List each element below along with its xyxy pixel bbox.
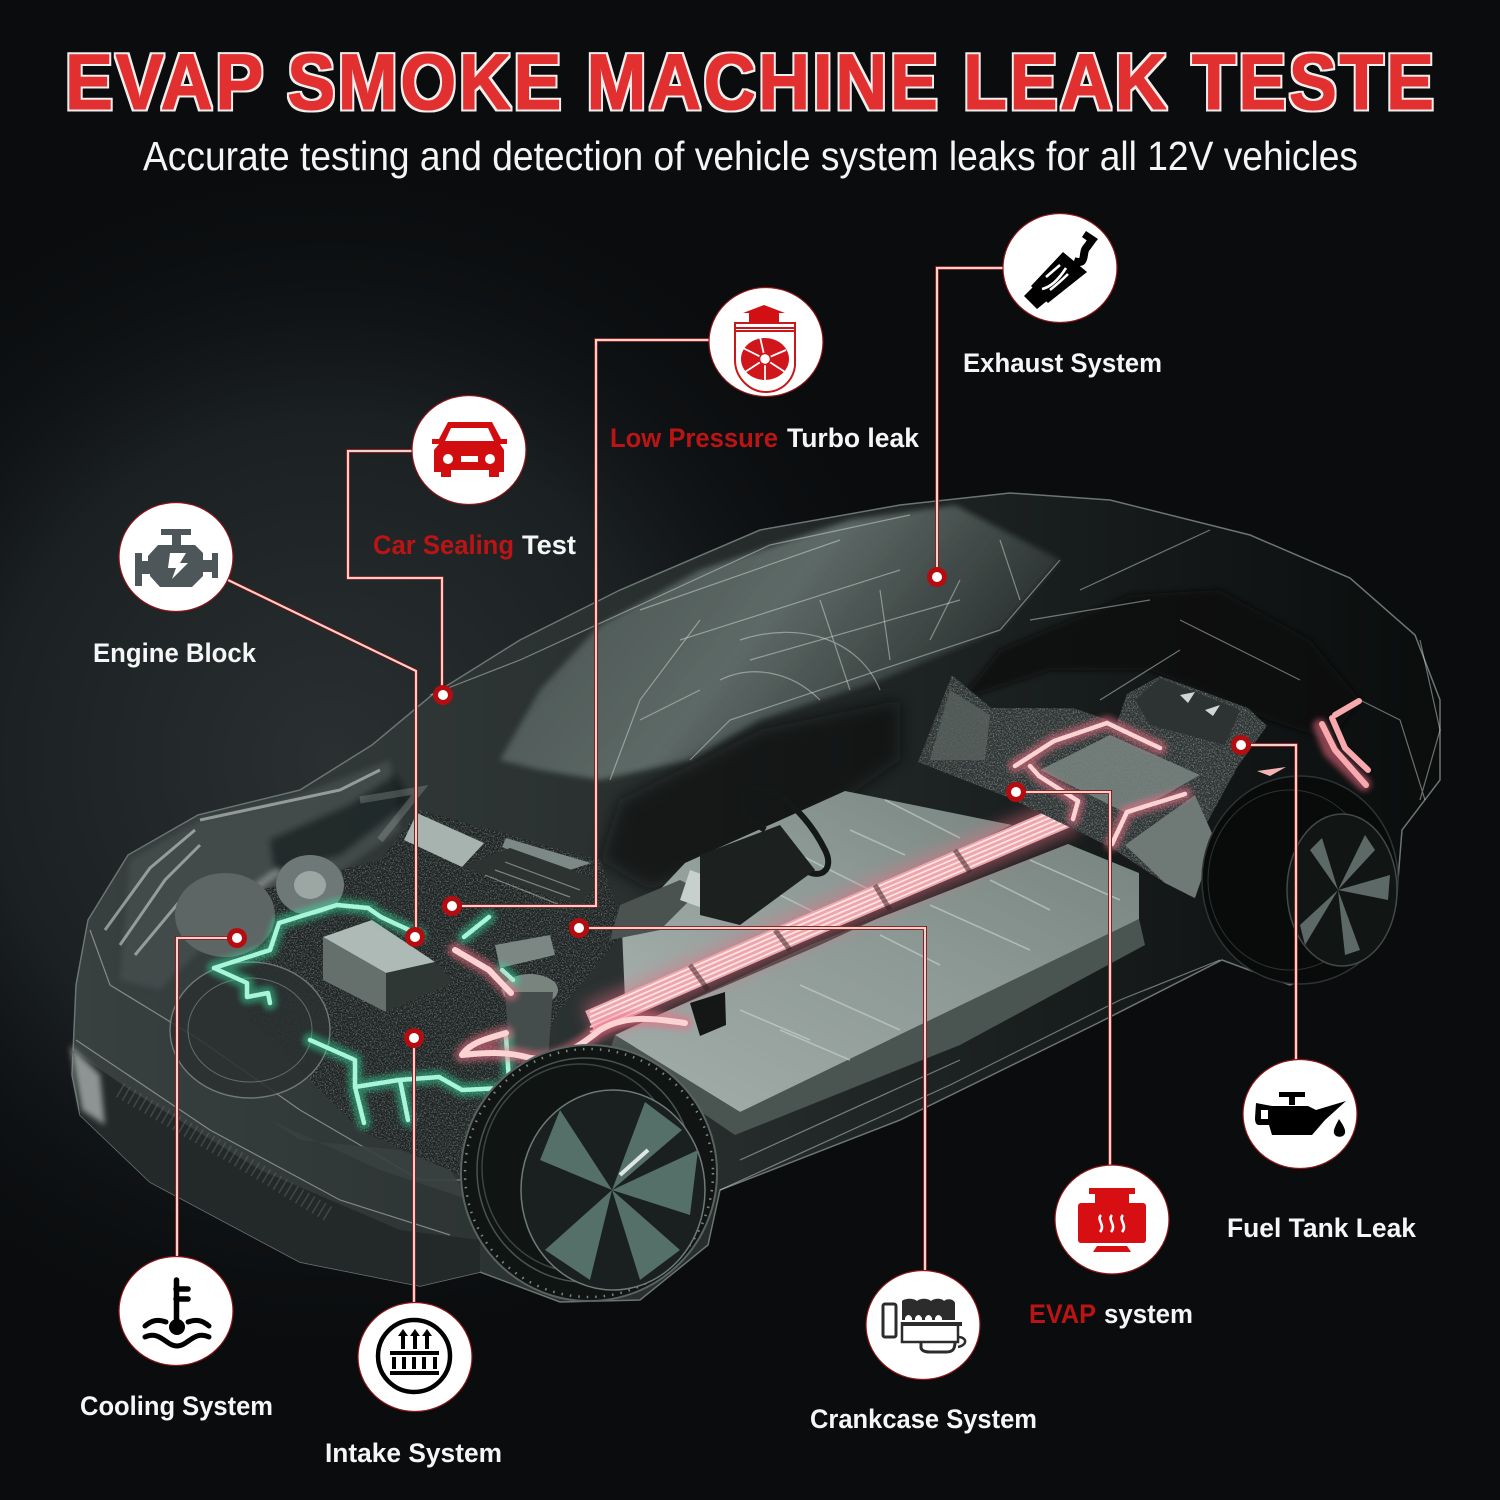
icon: turbo (709, 288, 823, 396)
engine pulley (276, 855, 344, 915)
label: low pressure turbo leak (610, 423, 920, 453)
label: engine block: Engine Block (93, 638, 257, 668)
label: car sealing test: Car Sealing (373, 530, 514, 560)
icon: crankcase (866, 1270, 980, 1380)
front engine bay (170, 800, 718, 1200)
label: EVAP system: EVAP (1029, 1299, 1096, 1329)
label: car sealing test: Test (522, 530, 576, 560)
transparent car illustration (70, 493, 1440, 1302)
pink front hoses (455, 950, 685, 1059)
rear wheel (1202, 776, 1398, 984)
icon: EVAP system (1055, 1165, 1169, 1274)
front lower bumper (72, 1050, 480, 1286)
strut tower (502, 974, 558, 1006)
label: EVAP system (1029, 1299, 1193, 1329)
label: intake system: Intake System (325, 1438, 502, 1468)
icon: intake system (358, 1302, 472, 1412)
title: EVAP SMOKE MACHINE LEAK TESTE (65, 38, 1434, 126)
side windows and rear cabin (960, 590, 1360, 740)
green glowing coolant lines (214, 905, 513, 1123)
windshield and roof glass (500, 505, 1060, 780)
icon: engine block (119, 502, 233, 612)
callout leader lines (177, 268, 1296, 1303)
label: exhaust system: Exhaust System (963, 348, 1162, 378)
battery pack upper half (622, 791, 1012, 1000)
label: crankcase system: Crankcase System (810, 1404, 1037, 1434)
headlight and body contour lines (90, 515, 1440, 1190)
label: cooling system: Cooling System (80, 1391, 273, 1421)
steering wheel and seat (700, 788, 828, 925)
label: low pressure turbo leak: Turbo leak (787, 423, 920, 453)
upper control box (404, 813, 484, 867)
battery seams (740, 800, 1120, 1060)
glowing pink centre tunnel (590, 802, 1075, 1032)
rear pink hoses (1015, 701, 1368, 844)
label: low pressure turbo leak: Low Pressure (610, 423, 778, 453)
subtitle: Accurate testing and detection of vehicle system leaks for all 12V vehicles (143, 133, 1358, 179)
front battery module (323, 920, 435, 973)
rear motor assembly (918, 676, 1267, 898)
callout marker dots (227, 567, 1251, 1048)
label: fuel tank leak: Fuel Tank Leak (1227, 1213, 1417, 1243)
icon: exhaust system (1003, 214, 1117, 322)
car body silhouette (72, 493, 1440, 1302)
front wheel (461, 1045, 717, 1301)
icon: cooling system (119, 1256, 233, 1366)
label: EVAP system: system (1104, 1299, 1193, 1329)
hood (120, 760, 400, 990)
battery connector (690, 992, 726, 1036)
battery pack lower half (615, 844, 1139, 1112)
icon: car sealing (412, 396, 526, 504)
icon: fuel tank oil can (1243, 1060, 1357, 1168)
